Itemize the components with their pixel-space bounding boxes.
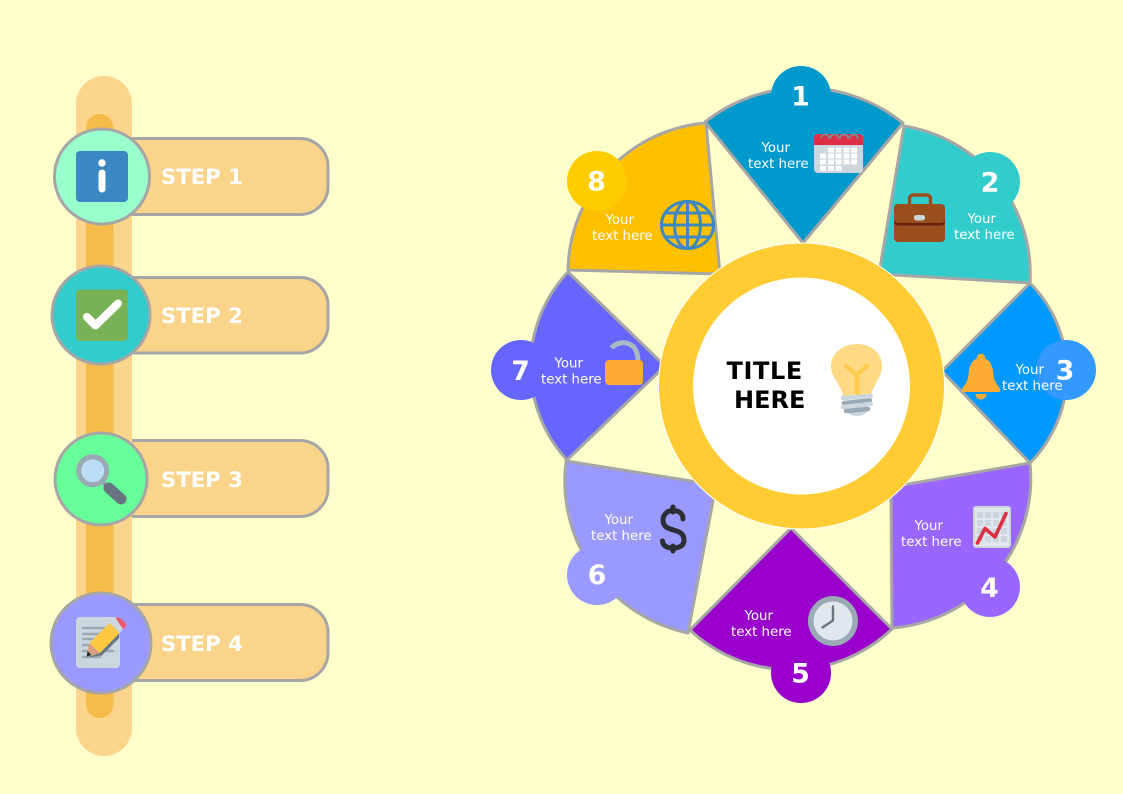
number 1: 1 [791,82,810,112]
panel: circular diagram [491,66,1096,703]
badge 1 [771,66,831,126]
panel: step timeline [51,76,328,756]
text: segment 8: Your [604,213,634,228]
segment 5 [690,528,892,703]
segment 7 [491,272,665,460]
badge 2 [960,152,1020,212]
segment 3 [942,283,1096,463]
badge 6 [567,545,627,605]
badge 4 [960,557,1020,617]
segment 2 [879,126,1030,283]
number 3: 3 [1056,356,1074,386]
segment 6 [565,461,716,633]
step 2 bar [90,278,328,353]
segment 8 [567,123,720,274]
badge 8 [567,151,627,211]
number 2: 2 [981,168,999,198]
badge 3 [1036,340,1096,400]
text: segment 1: Your [760,141,790,156]
number 5: 5 [791,658,810,690]
icon: open padlock [605,343,643,385]
icon: line chart [973,506,1011,548]
icon: calendar [814,134,863,173]
segment 1 [705,66,903,243]
step 1 bar [90,138,328,214]
title: TITLE [726,357,803,385]
center ring [658,243,944,529]
segment 4 [891,463,1031,628]
icon: dollar sign [662,507,684,551]
text: segment 5: text here [731,625,792,640]
step 1 icon: info [54,129,150,224]
text: segment 7: text here [541,372,602,388]
icon: clock [808,596,858,646]
timeline outer track [76,76,132,756]
text: segment 4: Your [914,519,943,534]
step 1 label: STEP 1 [161,164,243,189]
timeline inner track [86,114,114,718]
center disc [693,278,910,494]
text: segment 6: Your [604,513,633,528]
step 4 bar [90,604,328,680]
number 7: 7 [511,356,530,387]
text: segment 7: Your [554,356,583,372]
badge 7 [491,340,551,400]
number 6: 6 [588,560,606,591]
text: segment 5: Your [744,609,773,624]
text: segment 4: text here [901,535,962,550]
step 4 label: STEP 4 [161,631,243,656]
step 3 bar [90,440,328,516]
text: segment 1: text here [748,157,809,172]
step 2 icon: check mark [52,266,150,364]
step 3 icon: magnifier [55,433,147,525]
text: segment 3: text here [1002,379,1063,394]
icon: briefcase [894,195,945,242]
icon: globe [662,202,714,248]
step 4 icon: note and pencil [51,593,151,693]
step 3 label: STEP 3 [161,467,243,492]
text: segment 2: Your [966,212,996,227]
text: segment 2: text here [954,228,1015,243]
title: HERE [734,386,805,414]
icon: bell [962,354,1000,400]
text: segment 6: text here [591,529,652,544]
badge 5 [771,643,831,703]
text: segment 8: text here [592,229,653,244]
number 4: 4 [980,573,999,604]
step 2 label: STEP 2 [161,303,243,328]
text: segment 3: Your [1014,363,1044,378]
number 8: 8 [587,166,606,198]
icon: light bulb [831,344,882,416]
